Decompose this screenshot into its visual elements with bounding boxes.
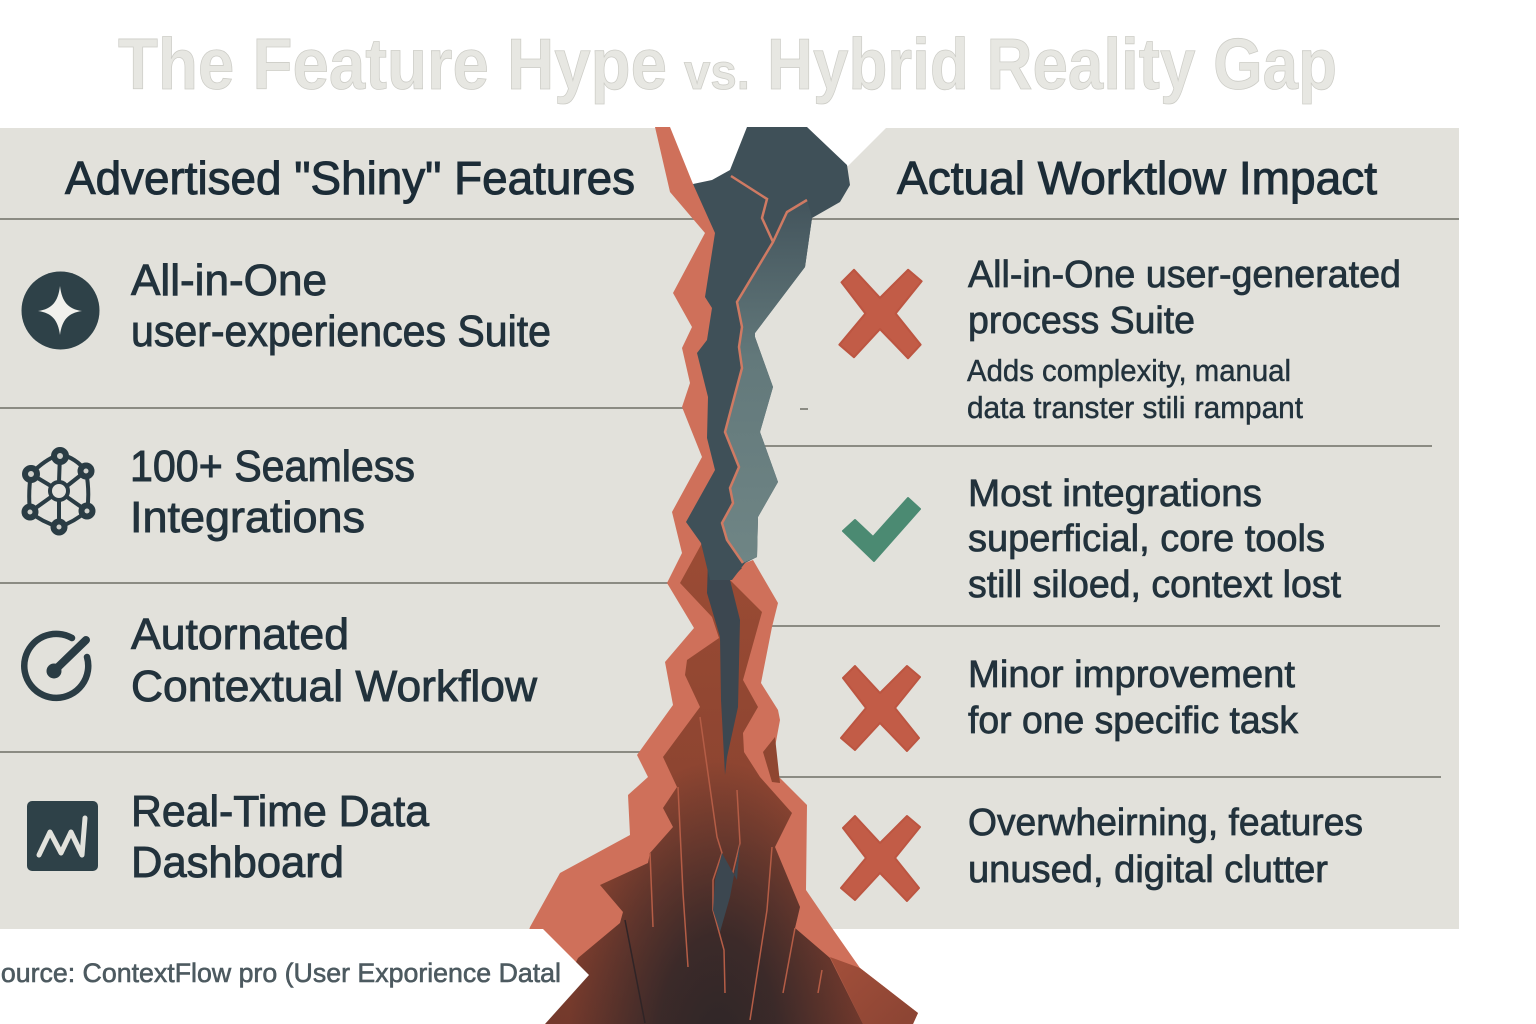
feature: integrations: Integrations bbox=[130, 493, 365, 542]
impact: all-in-one: Adds complexity, manual bbox=[967, 353, 1291, 388]
feature: all-in-one: All-in-One bbox=[131, 256, 327, 305]
crack: grey slate face bbox=[722, 200, 812, 563]
icon: integrations network bbox=[24, 450, 92, 532]
feature: dashboard: Real-Time Data bbox=[131, 787, 430, 836]
impact: unused features bbox=[968, 802, 1363, 891]
title bbox=[118, 25, 1337, 105]
impact: all-in-one: All-in-One user-generated bbox=[968, 254, 1401, 296]
icon: dashboard chart bbox=[27, 801, 98, 871]
impact: integrations bbox=[968, 473, 1341, 606]
crack: orange band bbox=[500, 127, 918, 1024]
impact: all-in-one: data transter stili rampant bbox=[967, 390, 1303, 425]
icon: green check bbox=[843, 498, 920, 561]
heading: actual impact: Actual Worktlow Impact bbox=[897, 152, 1377, 204]
title: The Feature Hype bbox=[118, 25, 667, 105]
impact: unused features: unused, digital clutter bbox=[968, 849, 1328, 891]
feature: all-in-one: user-experiences Suite bbox=[131, 307, 551, 356]
chasm crack illustration bbox=[500, 127, 918, 1024]
title: Hybrid Reality Gap bbox=[767, 25, 1337, 105]
impact: all-in-one: process Suite bbox=[968, 300, 1195, 342]
source label: Source: ContextFlow pro (User Exporience Datal bbox=[0, 958, 561, 988]
icon: workflow check dial bbox=[24, 634, 88, 698]
feature: dashboard: Dashboard bbox=[131, 838, 344, 887]
crack: dark slate upper bbox=[686, 127, 850, 580]
impact: integrations: still siloed, context lost bbox=[968, 564, 1341, 606]
feature: all-in-one bbox=[131, 256, 551, 356]
feature: integrations: 100+ Seamless bbox=[130, 442, 415, 491]
heading: advertised features: Advertised "Shiny" Features bbox=[65, 152, 635, 204]
feature: dashboard bbox=[131, 787, 430, 887]
source label bbox=[0, 929, 589, 1024]
feature: workflow bbox=[131, 610, 537, 711]
impact: unused features: Overwheirning, features bbox=[968, 802, 1363, 844]
impact: integrations: Most integrations bbox=[968, 473, 1262, 515]
icon: red cross one bbox=[839, 270, 922, 358]
crack: lower right brown wedge bbox=[830, 957, 918, 1024]
icon: sparkle circle bbox=[22, 272, 100, 350]
crack: dark red interior bbox=[545, 543, 863, 1024]
feature: workflow: Contextual Workflow bbox=[131, 662, 537, 711]
icon: red cross three bbox=[841, 816, 920, 901]
impact: minor improvement: for one specific task bbox=[968, 700, 1299, 742]
impact: minor improvement: Minor improvement bbox=[968, 654, 1295, 696]
feature: workflow: Autornated bbox=[131, 610, 349, 659]
icon: red cross two bbox=[841, 666, 920, 751]
impact: integrations: superficial, core tools bbox=[968, 518, 1325, 560]
crack: interior shadow bbox=[545, 543, 863, 1024]
crack: lower dark fissure bbox=[707, 560, 742, 932]
crack: right red sliver bbox=[763, 737, 780, 783]
panel: comparison background bbox=[0, 127, 1459, 929]
feature: integrations bbox=[130, 442, 415, 542]
crack: orange seam lines bbox=[722, 176, 807, 563]
impact: all-in-one bbox=[967, 254, 1401, 425]
crack: inner fissure lines bbox=[625, 717, 822, 1023]
impact: minor improvement bbox=[968, 654, 1299, 742]
title: vs. bbox=[684, 44, 750, 100]
